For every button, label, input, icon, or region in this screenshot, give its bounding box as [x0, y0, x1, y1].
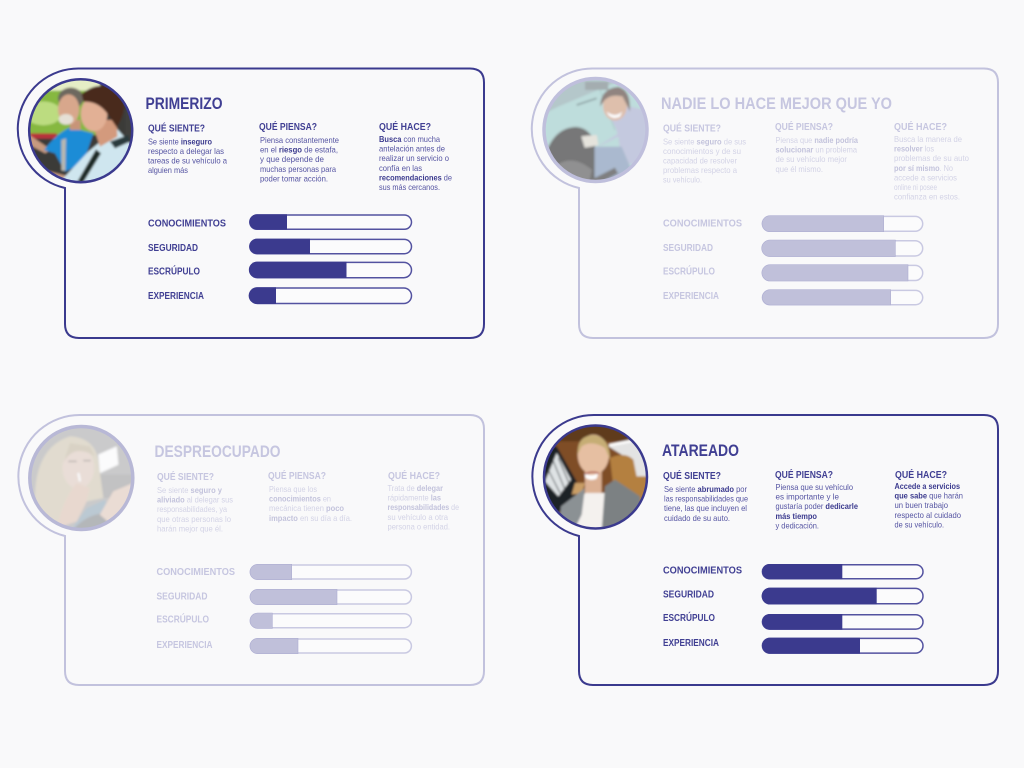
bar: seguridad: SEGURIDAD [156, 592, 208, 602]
bar: conocimientos [148, 214, 412, 230]
panel: Atareado [532, 415, 998, 685]
column: qué hace: confianza en estos. [894, 192, 960, 202]
photo: instructor and young driver [30, 80, 131, 181]
panel: Nadie lo hace mejor que yo [532, 68, 998, 338]
column: qué siente [663, 122, 746, 184]
bar: experiencia: EXPERIENCIA [148, 291, 204, 302]
column: qué hace: Busca con mucha [379, 134, 440, 144]
column: qué piensa [775, 468, 858, 530]
bar: experiencia [156, 638, 411, 654]
photo: blonde woman smoking in a car [32, 428, 131, 528]
column: qué piensa: y que depende de [260, 154, 324, 164]
column: qué hace: antelación antes de [379, 144, 445, 154]
column: qué hace: por sí mismo. No [894, 163, 953, 173]
column: qué hace: confía en las [379, 163, 422, 173]
bar: conocimientos [663, 564, 923, 579]
column: qué piensa: QUÉ PIENSA? [775, 468, 833, 481]
bar: seguridad [663, 588, 923, 604]
column: qué hace: responsabilidades de [388, 502, 459, 512]
bar: seguridad: SEGURIDAD [663, 243, 713, 254]
column: qué piensa: solucionar un problema [776, 145, 857, 155]
bar: escrúpulo: ESCRÚPULO [663, 612, 715, 624]
column: qué piensa: Piensa que su vehículo [776, 482, 853, 492]
column: qué piensa: en el riesgo de estafa, [260, 145, 338, 155]
column: qué hace: online ni posee [894, 182, 937, 192]
bar: escrúpulo [663, 612, 923, 630]
bar: escrúpulo [148, 262, 412, 278]
column: qué siente [663, 469, 748, 523]
title: NADIE LO HACE MEJOR QUE YO [661, 95, 892, 113]
column: qué siente: las responsabilidades que [664, 494, 748, 504]
photo: smiling businesswoman in a car [545, 426, 646, 527]
column: qué siente: tiene, las que incluyen el [664, 503, 747, 513]
panel: Primerizo [18, 68, 484, 338]
bar: experiencia: EXPERIENCIA [156, 640, 212, 651]
column: qué hace: persona o entidad. [388, 521, 450, 531]
column: qué hace: QUÉ HACE? [388, 469, 440, 482]
photo ring [544, 78, 647, 182]
column: qué piensa: poder tomar acción. [260, 173, 328, 183]
photo: man repairing a car wheel [546, 80, 646, 180]
column: qué hace: rápidamente las [388, 493, 441, 503]
column: qué siente: problemas respecto a [663, 165, 737, 175]
bar: seguridad [148, 239, 412, 254]
column: qué siente: responsabilidades, ya [157, 504, 227, 514]
column: qué piensa: conocimientos en [269, 494, 331, 504]
column: qué siente: Se siente abrumado por [664, 484, 747, 494]
column: qué piensa [775, 120, 858, 174]
column: qué siente: harán mejor que él. [157, 523, 223, 533]
column: qué piensa: y dedicación. [776, 520, 819, 530]
column: qué hace: un buen trabajo [894, 500, 948, 510]
column: qué hace: recomendaciones de [379, 172, 452, 182]
bar: conocimientos: CONOCIMIENTOS [663, 566, 742, 576]
column: qué piensa: gustaría poder dedicarle [776, 501, 858, 511]
column: qué piensa: Piensa que nadie podría [776, 135, 858, 145]
column: qué hace: que sabe que harán [894, 491, 963, 501]
bar: escrúpulo [156, 613, 411, 628]
column: qué piensa: QUÉ PIENSA? [775, 120, 833, 133]
column: qué piensa: mecánica tienen poco [269, 503, 344, 513]
column: qué siente: que otras personas lo [157, 514, 231, 524]
bar: conocimientos: CONOCIMIENTOS [156, 567, 235, 578]
column: qué hace: sus más cercanos. [379, 182, 440, 192]
column: qué siente: QUÉ SIENTE? [157, 470, 214, 483]
column: qué siente: respecto a delegar las [148, 146, 224, 156]
column: qué hace [894, 468, 963, 529]
bar: seguridad: SEGURIDAD [148, 243, 198, 254]
column: qué piensa: más tiempo [776, 511, 817, 521]
column: qué siente: tareas de su vehículo a [148, 156, 227, 166]
bar: seguridad: SEGURIDAD [663, 590, 714, 600]
column: qué siente: Se siente seguro y [157, 485, 222, 495]
column: qué siente: aliviado al delegar sus [157, 495, 233, 505]
bar: experiencia [663, 290, 923, 305]
column: qué piensa [259, 120, 339, 183]
bar: conocimientos [156, 564, 411, 580]
column: qué siente [148, 122, 227, 175]
column: qué siente: QUÉ SIENTE? [148, 122, 205, 134]
column: qué hace: realizar un servicio o [379, 153, 449, 163]
bar: conocimientos [663, 216, 923, 232]
panel: Despreocupado [18, 415, 484, 685]
column: qué hace: QUÉ HACE? [379, 120, 431, 133]
column: qué siente [157, 470, 233, 533]
bar: experiencia: EXPERIENCIA [663, 291, 719, 302]
column: qué hace: accede a servicios [894, 172, 957, 182]
column: qué piensa: QUÉ PIENSA? [259, 120, 317, 133]
column: qué piensa: impacto en su día a día. [269, 513, 352, 523]
column: qué siente: conocimientos y de su [663, 146, 741, 156]
column: qué piensa: que él mismo. [776, 164, 823, 174]
photo ring [29, 79, 132, 182]
column: qué hace: su vehículo a otra [388, 512, 448, 522]
column: qué hace: resolver los [894, 144, 934, 154]
column: qué piensa: de su vehículo mejor [776, 154, 847, 164]
column: qué piensa: QUÉ PIENSA? [268, 469, 326, 482]
panel outline [532, 415, 998, 685]
column: qué siente: QUÉ SIENTE? [663, 469, 721, 482]
column: qué hace [388, 469, 459, 531]
column: qué hace [894, 120, 969, 202]
column: qué siente: QUÉ SIENTE? [663, 122, 721, 134]
bar: experiencia: EXPERIENCIA [663, 638, 719, 649]
column: qué siente: Se siente inseguro [148, 136, 212, 146]
bar: escrúpulo: ESCRÚPULO [148, 266, 200, 278]
column: qué piensa: es importante y le [776, 492, 839, 502]
panel outline [18, 68, 484, 338]
column: qué siente: Se siente seguro de sus [663, 136, 746, 146]
column: qué hace: Accede a servicios [894, 481, 960, 491]
title: DESPREOCUPADO [154, 443, 281, 461]
column: qué hace [379, 120, 452, 192]
column: qué piensa: Piensa constantemente [260, 135, 339, 145]
panel outline [18, 415, 484, 685]
column: qué piensa [268, 469, 352, 523]
bar: escrúpulo [663, 265, 923, 281]
bar: seguridad [663, 240, 923, 257]
title: PRIMERIZO [146, 95, 223, 113]
title: ATAREADO [662, 442, 739, 460]
column: qué hace: problemas de su auto [894, 153, 969, 163]
column: qué piensa: Piensa que los [269, 484, 317, 494]
bar: escrúpulo: ESCRÚPULO [663, 266, 715, 278]
column: qué siente: cuidado de su auto. [664, 513, 730, 523]
column: qué hace: Trata de delegar [388, 483, 444, 493]
column: qué siente: capacidad de resolver [663, 156, 737, 166]
column: qué piensa: muchas personas para [260, 164, 336, 174]
column: qué hace: QUÉ HACE? [895, 468, 947, 481]
bar: escrúpulo: ESCRÚPULO [156, 614, 209, 626]
bar: conocimientos: CONOCIMIENTOS [663, 218, 742, 230]
bar: experiencia [663, 638, 923, 654]
column: qué hace: respecto al cuidado [894, 510, 961, 520]
bar: conocimientos: CONOCIMIENTOS [148, 218, 226, 230]
column: qué siente: su vehículo. [663, 174, 702, 184]
photo ring [544, 426, 647, 528]
column: qué hace: QUÉ HACE? [894, 120, 947, 133]
column: qué siente: alguien más [148, 165, 188, 175]
bar: seguridad [156, 589, 411, 605]
column: qué hace: Busca la manera de [894, 134, 962, 144]
column: qué hace: de su vehículo. [894, 519, 944, 529]
panel outline [532, 68, 998, 338]
photo ring [30, 426, 133, 530]
bar: experiencia [148, 287, 412, 304]
